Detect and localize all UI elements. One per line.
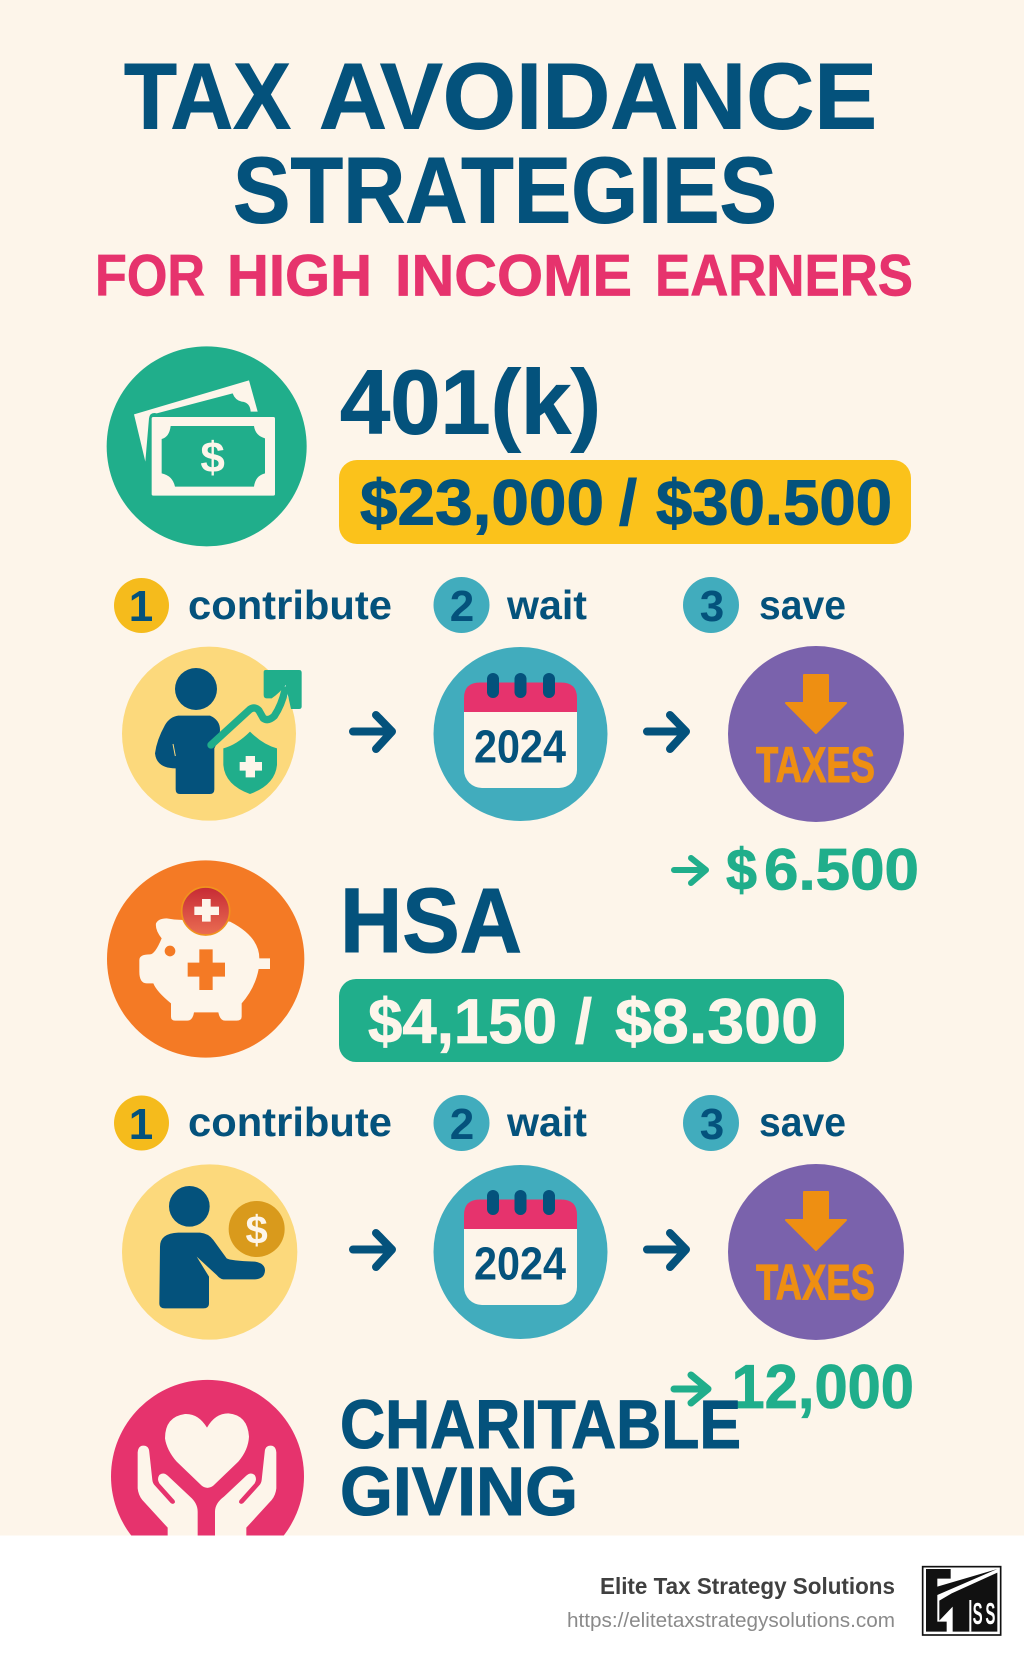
icon: calendar 2024: 2024 bbox=[474, 1238, 566, 1290]
step 2 badge: 2 bbox=[450, 582, 474, 631]
icon: calendar 2024: 2024 bbox=[474, 720, 566, 772]
icon: person with coin bbox=[122, 1164, 297, 1340]
subtitle: HIGH bbox=[227, 244, 372, 308]
icon: person with growth and shield bbox=[122, 647, 302, 821]
savings callout: 12,000: 12,000 bbox=[732, 1353, 914, 1422]
heading: charitable giving: CHARITABLE bbox=[340, 1386, 741, 1463]
icon: taxes down bbox=[728, 646, 904, 822]
section: charitable giving bbox=[111, 1380, 741, 1573]
arrow bbox=[353, 715, 392, 749]
limit pill: HSA bbox=[339, 979, 844, 1062]
limit pill: 401(k): $30.500 bbox=[656, 466, 892, 538]
step 2 label: wait bbox=[506, 1099, 587, 1145]
icon: taxes down bbox=[728, 1164, 904, 1340]
limit pill: HSA: $8.300 bbox=[615, 987, 818, 1057]
step 1 badge bbox=[114, 1096, 169, 1150]
step 3 badge: 3 bbox=[700, 582, 724, 631]
icon: money bills: $ bbox=[200, 433, 225, 482]
subtitle: FOR bbox=[95, 244, 205, 308]
step 2 badge: 2 bbox=[450, 1100, 474, 1149]
logo: S bbox=[973, 1597, 983, 1631]
logo bbox=[923, 1567, 1001, 1635]
footer url: https://elitetaxstrategysolutions.com bbox=[567, 1610, 895, 1632]
steps row: 401(k) labels bbox=[114, 577, 846, 633]
step 3 badge: 3 bbox=[700, 1100, 724, 1149]
arrow bbox=[353, 1233, 392, 1267]
icon: person with coin: $ bbox=[246, 1208, 268, 1252]
icon: piggy bank bbox=[107, 860, 304, 1058]
limit pill: 401(k): $23,000 bbox=[360, 466, 604, 538]
step 3 badge bbox=[683, 577, 739, 633]
title: AVOIDANCE bbox=[319, 44, 877, 148]
logo: S bbox=[985, 1597, 995, 1631]
step 3 label: save bbox=[759, 1099, 846, 1145]
title: STRATEGIES bbox=[233, 138, 777, 242]
savings callout: $6.500 bbox=[674, 838, 919, 902]
arrow bbox=[647, 1233, 686, 1267]
step 2 badge bbox=[434, 1095, 490, 1151]
step 2 badge bbox=[434, 577, 490, 633]
title bbox=[124, 44, 877, 242]
icon: money bills bbox=[107, 346, 307, 546]
icon: taxes down: TAXES bbox=[756, 1254, 875, 1310]
heading: 401(k): 401(k) bbox=[340, 352, 601, 454]
arrow bbox=[647, 715, 686, 749]
icon: calendar 2024 bbox=[434, 647, 608, 821]
step 3 badge bbox=[683, 1095, 739, 1151]
footer company name: Elite Tax Strategy Solutions bbox=[600, 1573, 895, 1599]
step 3 label: save bbox=[759, 582, 846, 628]
limit pill: HSA: / bbox=[575, 987, 592, 1057]
section: HSA bbox=[107, 860, 844, 1062]
subtitle: EARNERS bbox=[655, 244, 913, 308]
title: TAX bbox=[124, 44, 291, 148]
limit pill: 401(k) bbox=[339, 460, 911, 544]
step 1 label: contribute bbox=[188, 582, 392, 628]
step 1 badge: 1 bbox=[129, 582, 153, 631]
heading: charitable giving: GIVING bbox=[340, 1453, 578, 1530]
step 1 badge bbox=[114, 578, 169, 633]
steps row: HSA labels bbox=[114, 1095, 846, 1151]
savings callout: $6.500: $ bbox=[726, 838, 757, 902]
heading: HSA: HSA bbox=[340, 870, 522, 972]
footer bbox=[0, 1536, 1024, 1666]
step 1 badge: 1 bbox=[129, 1100, 153, 1149]
heading: charitable giving bbox=[340, 1386, 741, 1530]
icon: calendar 2024 bbox=[434, 1165, 608, 1339]
section: 401(k) bbox=[107, 346, 911, 546]
icon: taxes down: TAXES bbox=[756, 737, 875, 793]
savings callout: $6.500: 6.500 bbox=[764, 838, 919, 902]
step 1 label: contribute bbox=[188, 1099, 392, 1145]
icon: hands holding heart bbox=[111, 1380, 304, 1573]
subtitle bbox=[95, 244, 913, 308]
subtitle: INCOME bbox=[395, 244, 632, 308]
limit pill: HSA: $4,150 bbox=[368, 987, 557, 1057]
limit pill: 401(k): / bbox=[619, 466, 637, 538]
step 2 label: wait bbox=[506, 582, 587, 628]
